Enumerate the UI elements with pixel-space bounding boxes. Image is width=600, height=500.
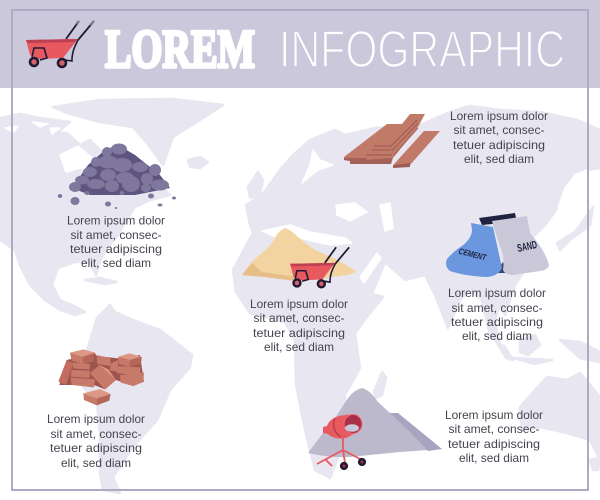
text: bags: sit amet, consec- [452,302,543,315]
text: rocks: elit, sed diam [81,257,151,270]
text: planks: tetuer adipiscing [453,139,545,152]
icon: cement mixer [317,414,365,469]
icon: cement pile [308,388,442,457]
text: sand [250,298,348,354]
text: rocks: sit amet, consec- [70,229,162,242]
icon: cement and sand bags [446,213,549,277]
text: rocks: Lorem ipsum dolor [67,214,165,228]
icon: header wheelbarrow [26,21,94,67]
text: bags [448,287,546,343]
text: rocks [67,214,165,270]
icon: sand pile [242,228,357,281]
text: bags: tetuer adipiscing [451,316,543,329]
text: mixer: Lorem ipsum dolor [445,409,543,422]
text: sand: elit, sed diam [264,341,334,354]
text: mixer: tetuer adipiscing [448,438,540,451]
header band [0,0,600,88]
text: mixer [445,409,543,465]
title: LOREM [105,19,255,79]
text: planks: elit, sed diam [464,153,534,166]
label: sand: SAND [516,239,538,255]
text: rocks: tetuer adipiscing [70,243,162,256]
text: sand: Lorem ipsum dolor [250,298,348,311]
label: cement: CEMENT [458,246,488,263]
text: bags: Lorem ipsum dolor [448,287,546,300]
text: planks: sit amet, consec- [454,124,545,137]
text: bricks: elit, sed diam [61,457,131,470]
icon: bricks [58,349,144,405]
world map [0,99,600,493]
icon: wheelbarrow on sand [290,247,349,287]
text: planks [450,110,548,166]
text: bricks [47,413,145,470]
text: mixer: elit, sed diam [459,452,529,465]
text: bricks: sit amet, consec- [50,428,142,441]
text: mixer: sit amet, consec- [448,423,540,436]
icon: wood planks [344,114,440,168]
text: bricks: Lorem ipsum dolor [47,413,145,426]
text: planks: Lorem ipsum dolor [450,110,548,123]
text: bags: elit, sed diam [462,330,532,343]
title [105,19,565,79]
text: sand: tetuer adipiscing [253,327,345,340]
icon: rock pile [58,144,176,209]
text: bricks: tetuer adipiscing [50,442,142,455]
text: sand: sit amet, consec- [254,312,345,325]
